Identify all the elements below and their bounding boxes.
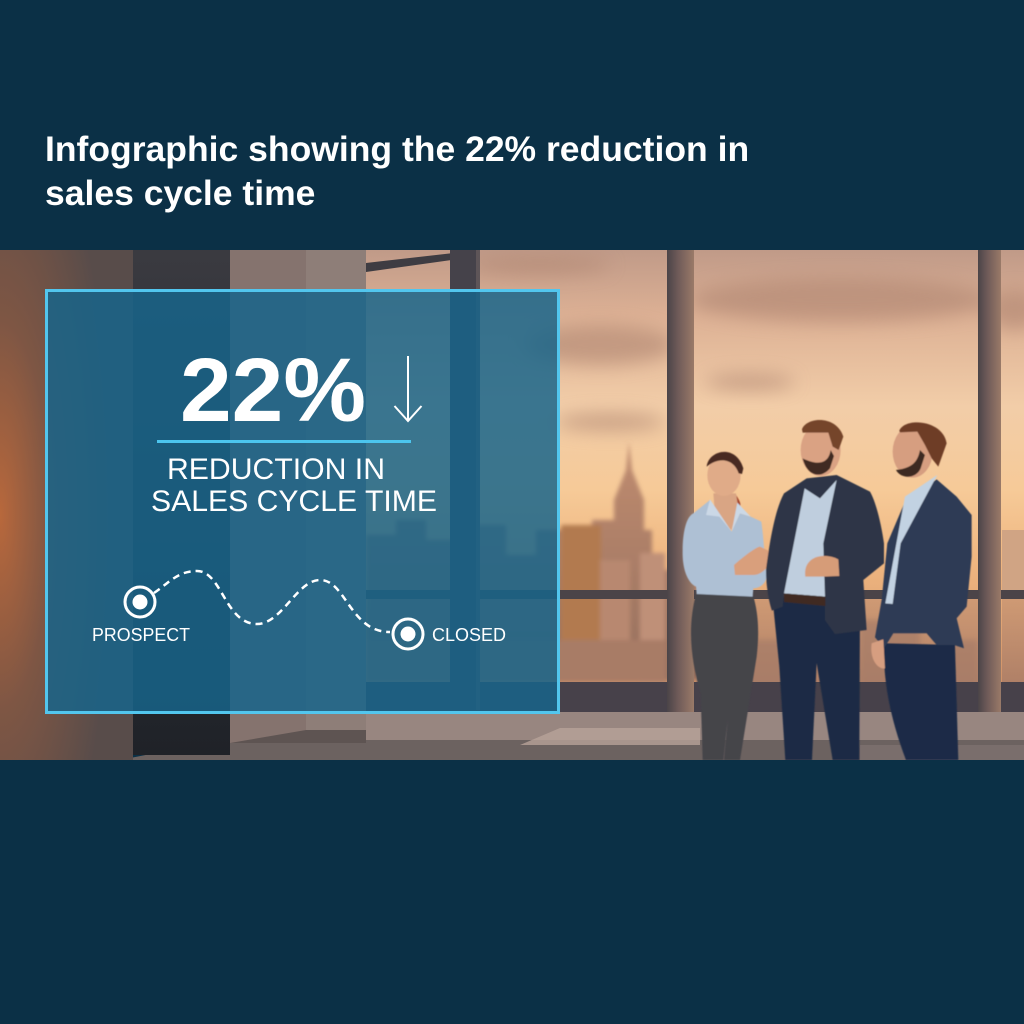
icon: start node bbox=[125, 587, 155, 617]
title: Infographic showing the 22% reduction in bbox=[45, 129, 749, 169]
sky through windows bbox=[366, 250, 1024, 710]
label: prospect: PROSPECT bbox=[92, 625, 190, 645]
photo: office with skyline at sunset bbox=[0, 250, 1024, 760]
three business people bbox=[683, 420, 972, 760]
person: man centre bbox=[766, 420, 884, 760]
window frames bbox=[366, 590, 1024, 599]
headline value: 22% bbox=[180, 341, 366, 441]
title: sales cycle time bbox=[45, 173, 315, 213]
glass stat panel bbox=[46, 290, 558, 712]
icon: end node bbox=[393, 619, 423, 649]
left wall panels bbox=[0, 250, 133, 760]
skyline bbox=[366, 442, 702, 683]
subhead: SALES CYCLE TIME bbox=[151, 485, 437, 518]
floor bbox=[133, 740, 1024, 760]
subhead: REDUCTION IN bbox=[167, 453, 385, 486]
subhead bbox=[151, 453, 437, 518]
band below photo bbox=[0, 760, 1024, 1024]
icon: down arrow bbox=[394, 356, 422, 421]
label: closed: CLOSED bbox=[432, 625, 506, 645]
accent rule bbox=[157, 440, 411, 443]
title bbox=[45, 129, 749, 213]
journey path bbox=[92, 571, 506, 649]
person: woman bbox=[683, 452, 774, 760]
person: man right bbox=[871, 422, 972, 760]
clouds bbox=[470, 256, 1024, 431]
full page illustration bbox=[0, 250, 1024, 760]
